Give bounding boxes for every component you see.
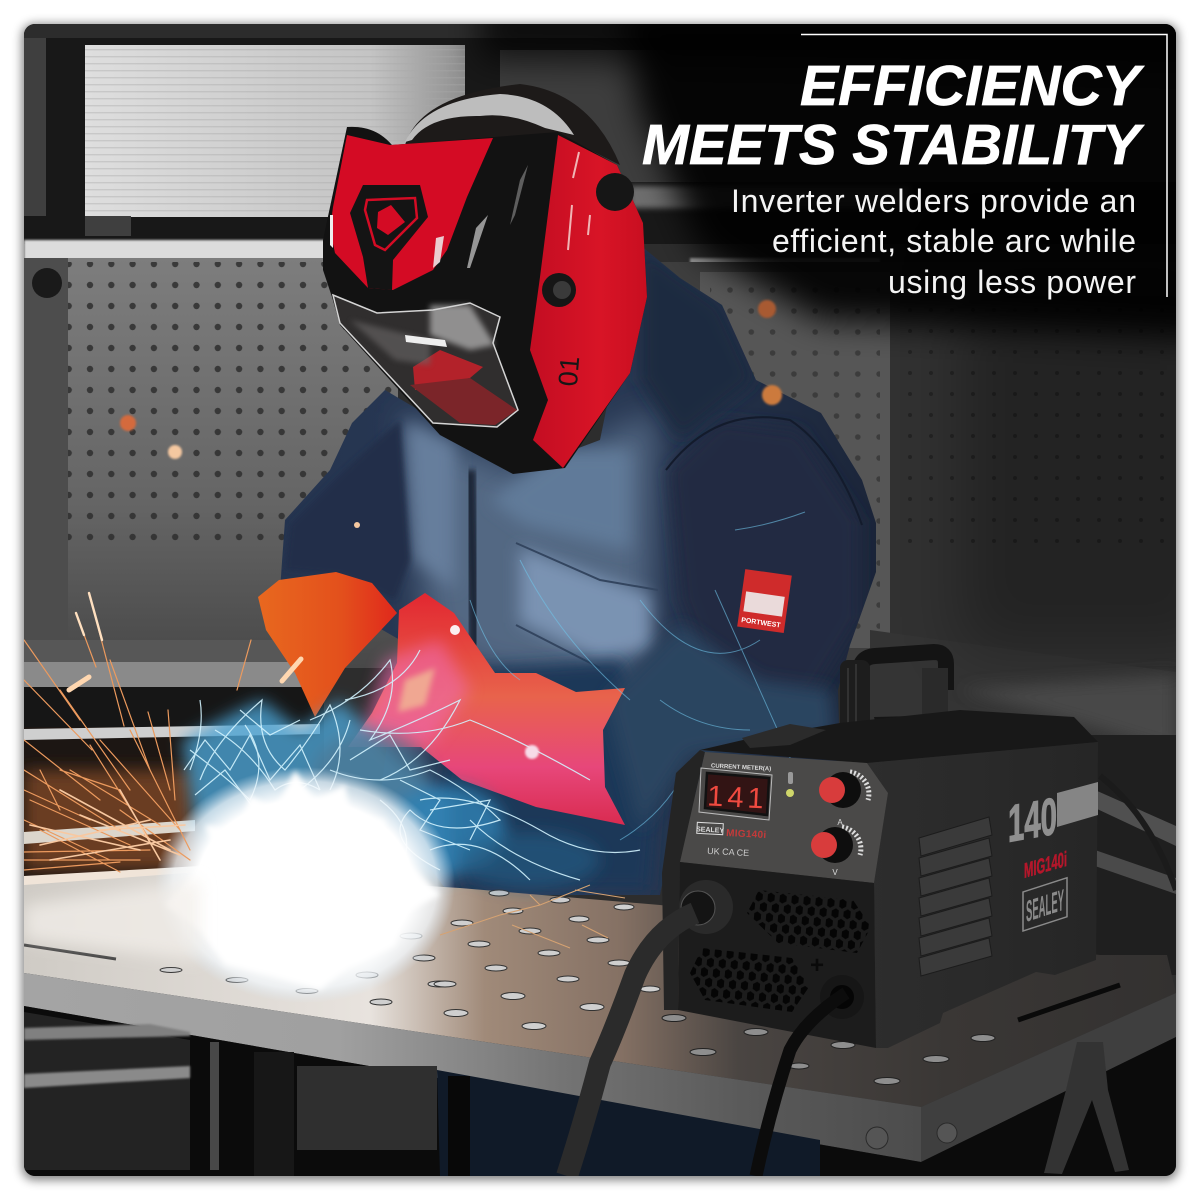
side louvres — [919, 817, 992, 976]
machine carry handle — [840, 652, 957, 745]
machine side panel — [867, 742, 1098, 1048]
status indicator — [786, 772, 794, 797]
table scorch sparks — [440, 885, 625, 948]
helmet marking 01: 01 — [553, 355, 585, 387]
workshop background: LED strip — [24, 238, 800, 262]
table holes in shadow — [662, 1014, 995, 1084]
helmet highlights — [330, 165, 528, 268]
table side edge — [921, 993, 1176, 1162]
heading: EFFICIENCY — [800, 54, 1144, 117]
machine lower front — [678, 862, 876, 1048]
lower vent — [690, 948, 809, 1012]
sparks — [24, 593, 301, 872]
lower connector — [820, 975, 864, 1019]
helmet clear lens — [333, 295, 518, 427]
workshop background: upper cabinets — [24, 24, 1176, 244]
upper vent — [747, 890, 871, 953]
approval marks: UK CA CE — [707, 846, 749, 858]
overlay: dark shading behind heading — [480, 0, 1200, 340]
table top — [24, 872, 1176, 1162]
table bolts — [866, 1123, 957, 1149]
machine top — [700, 710, 1098, 763]
front model label: MIG140i — [726, 828, 767, 841]
front SEALEY label: SEALEY — [696, 826, 725, 835]
below table: drawers, legs and trousers — [24, 1006, 1176, 1176]
welder figure: jacket — [280, 245, 876, 895]
welder figure: left glove — [258, 572, 397, 717]
workshop background: worktops — [24, 630, 1176, 975]
current knob — [819, 772, 869, 808]
display caption: CURRENT METER(A) — [711, 763, 771, 773]
welding helmet — [323, 127, 647, 474]
welder figure: hair and headband — [405, 84, 620, 165]
workshop background: left pegboard — [24, 258, 398, 668]
workshop background: right pegboards — [661, 262, 972, 660]
rear cable — [1100, 776, 1176, 890]
welding flash — [24, 767, 455, 1003]
digital display — [699, 768, 772, 820]
subheading: efficient, stable arc while — [772, 223, 1136, 259]
blue smoke from the arc — [182, 512, 805, 888]
helmet red visor panel — [330, 135, 493, 290]
welding machine — [567, 652, 1176, 1176]
torch cable — [567, 913, 695, 1176]
helmet side knobs — [542, 173, 634, 307]
sleeve badge — [737, 569, 792, 633]
machine latch — [742, 724, 826, 748]
table frame with sparks behind flash — [24, 724, 324, 900]
table front edge — [24, 973, 921, 1162]
voltage caption: V — [832, 868, 838, 877]
side model label: MIG140i — [1024, 847, 1067, 883]
side 140 badge: 140 — [1008, 788, 1057, 854]
subheading: Inverter welders provide an — [731, 183, 1136, 219]
heading — [642, 54, 1144, 176]
subheading: using less power — [888, 264, 1136, 300]
heading: MEETS STABILITY — [642, 113, 1144, 176]
earth cable — [756, 993, 846, 1176]
welder figure: right gauntlet glove — [348, 593, 625, 825]
right side darkening — [966, 332, 1176, 644]
corner bracket line — [801, 34, 1167, 297]
digital display: 141 — [706, 780, 768, 816]
knob captions: A — [837, 818, 843, 827]
machine left bevel — [662, 750, 705, 1010]
table clamp — [1044, 1042, 1129, 1174]
glowing spark orbs — [120, 300, 782, 759]
welding machine: SEALEY — [1026, 882, 1064, 929]
machine control panel — [680, 752, 888, 883]
upper connector — [679, 880, 733, 934]
front SEALEY label — [696, 822, 725, 835]
terminal plus mark: + — [810, 952, 824, 979]
sleeve badge: PORTWEST — [741, 617, 782, 630]
pale wisps on jacket — [470, 512, 805, 840]
smoke wisps — [184, 650, 640, 880]
table holes — [160, 890, 660, 1030]
subheading — [731, 183, 1136, 300]
helmet red side shell — [530, 135, 647, 468]
side SEALEY logo — [1023, 878, 1067, 931]
helmet hexagon logo — [350, 185, 428, 290]
helmet side stripes — [568, 152, 590, 250]
voltage knob — [811, 827, 861, 863]
table slots — [24, 945, 116, 959]
